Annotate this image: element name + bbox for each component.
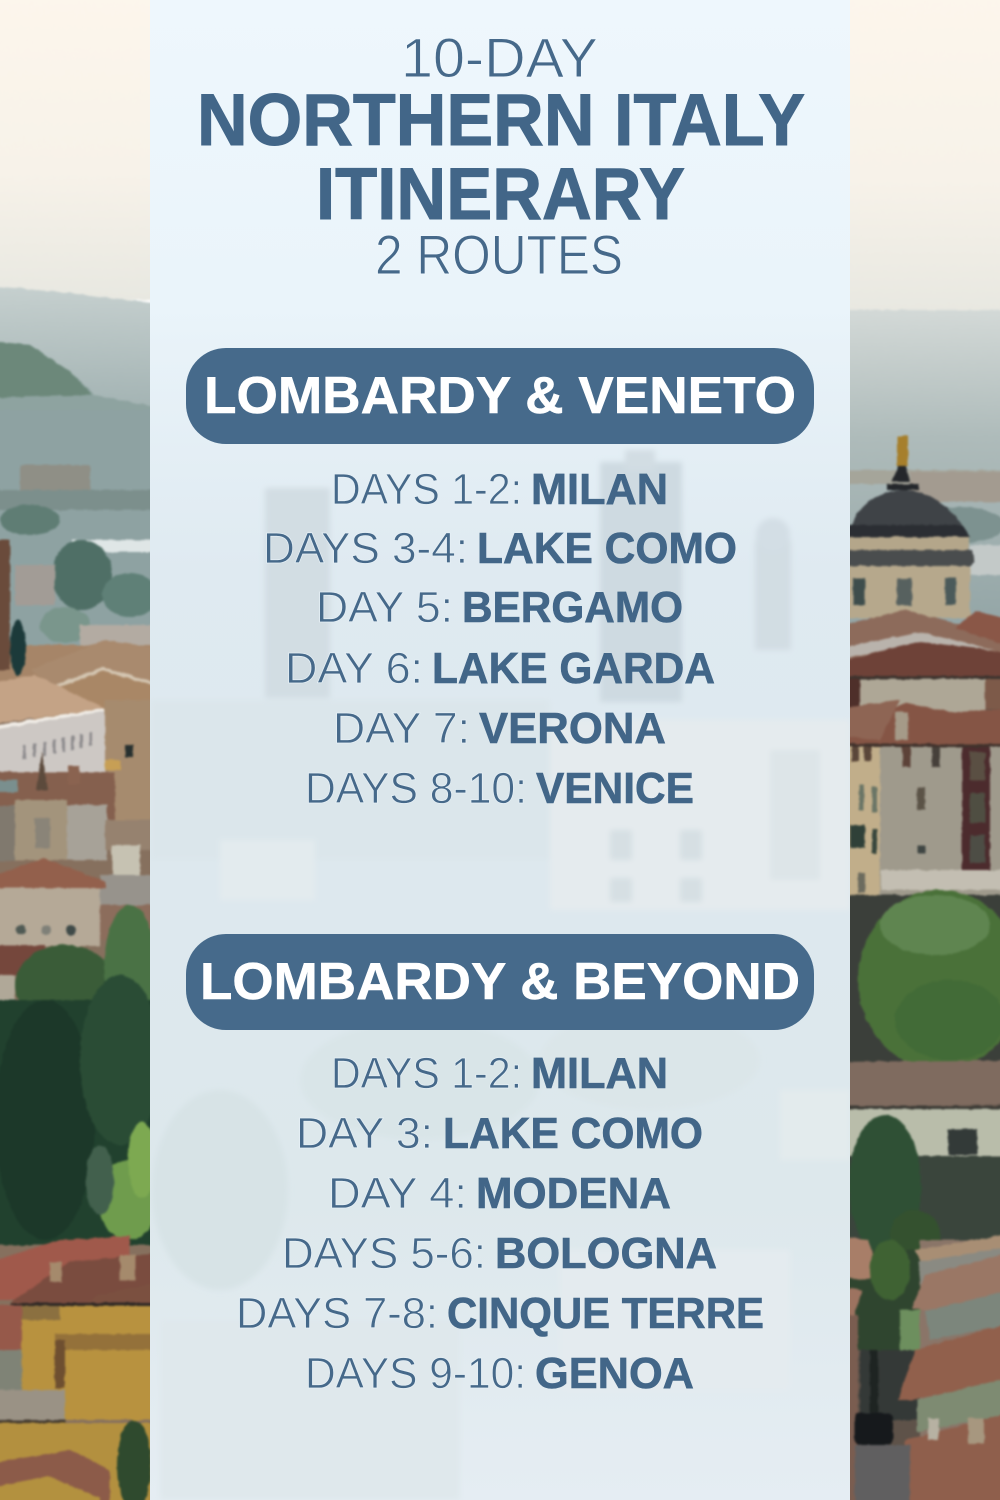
line: day 3 Lake Como: DAY 3: xyxy=(296,1109,433,1158)
line: days 1-2 Milan: DAYS 1-2: xyxy=(331,1049,522,1098)
route 1 day list xyxy=(263,465,737,813)
title block xyxy=(197,26,805,286)
translucent centre panel xyxy=(150,0,850,1500)
line: days 8-10 Venice xyxy=(305,764,694,813)
line: days 3-4 Lake Como: DAYS 3-4: xyxy=(263,524,468,573)
line: days 9-10 Genoa xyxy=(305,1349,694,1398)
line: day 5 Bergamo: DAY 5: xyxy=(316,583,453,632)
heading line: 10-DAY: 10-DAY xyxy=(401,26,598,89)
line: days 5-6 Bologna: BOLOGNA xyxy=(495,1229,717,1278)
line: day 4 Modena xyxy=(328,1169,671,1218)
line: days 8-10 Venice: DAYS 8-10: xyxy=(305,764,527,813)
route 1 heading pill xyxy=(186,348,814,444)
line: day 7 Verona xyxy=(333,704,666,753)
trees xyxy=(858,890,1000,1070)
route 2 heading pill xyxy=(186,934,814,1030)
line: days 1-2 Milan xyxy=(331,1049,668,1098)
line: day 3 Lake Como xyxy=(296,1109,703,1158)
rooftops xyxy=(0,643,150,682)
line: day 6 Lake Garda: DAY 6: xyxy=(285,644,423,693)
line: days 1-2 Milan: MILAN xyxy=(531,465,668,514)
line: day 6 Lake Garda xyxy=(285,644,715,693)
line: days 3-4 Lake Como: LAKE COMO xyxy=(477,524,737,573)
icon: golden statue xyxy=(897,436,908,466)
line: days 9-10 Genoa: GENOA xyxy=(535,1349,694,1398)
line: days 1-2 Milan: MILAN xyxy=(531,1049,668,1098)
trees xyxy=(14,942,106,1002)
route 1 heading pill: LOMBARDY & VENETO xyxy=(204,367,796,425)
lower roofs xyxy=(0,1236,130,1300)
line: day 4 Modena: DAY 4: xyxy=(328,1169,467,1218)
line: day 5 Bergamo: BERGAMO xyxy=(462,583,683,632)
line: days 7-8 Cinque Terre: DAYS 7-8: xyxy=(236,1289,438,1338)
faded photo showing through the panel xyxy=(192,450,790,1286)
line: day 3 Lake Como: LAKE COMO xyxy=(443,1109,703,1158)
line: days 5-6 Bologna: DAYS 5-6: xyxy=(282,1229,486,1278)
heading line: ITINERARY: ITINERARY xyxy=(316,154,685,235)
line: days 1-2 Milan: DAYS 1-2: xyxy=(331,465,522,514)
photo background: right strip with domed tower and rooftops xyxy=(850,0,1000,1500)
line: days 7-8 Cinque Terre xyxy=(236,1289,764,1338)
heading line: NORTHERN ITALY: NORTHERN ITALY xyxy=(197,80,805,161)
line: day 7 Verona: DAY 7: xyxy=(333,704,470,753)
route 2 day list xyxy=(236,1049,764,1398)
route 2 heading pill: LOMBARDY & BEYOND xyxy=(200,953,800,1011)
line: days 1-2 Milan xyxy=(331,465,668,514)
line: day 5 Bergamo xyxy=(316,583,683,632)
line: day 4 Modena: MODENA xyxy=(476,1169,671,1218)
heading line: 2 ROUTES: 2 ROUTES xyxy=(375,223,623,286)
line: days 9-10 Genoa: DAYS 9-10: xyxy=(305,1349,526,1398)
line: days 5-6 Bologna xyxy=(282,1229,717,1278)
line: days 3-4 Lake Como xyxy=(263,524,737,573)
line: days 7-8 Cinque Terre: CINQUE TERRE xyxy=(447,1289,764,1338)
line: day 6 Lake Garda: LAKE GARDA xyxy=(432,644,715,693)
photo background: left strip of Bergamo rooftops xyxy=(0,0,150,1500)
line: day 7 Verona: VERONA xyxy=(479,704,666,753)
line: days 8-10 Venice: VENICE xyxy=(536,764,694,813)
